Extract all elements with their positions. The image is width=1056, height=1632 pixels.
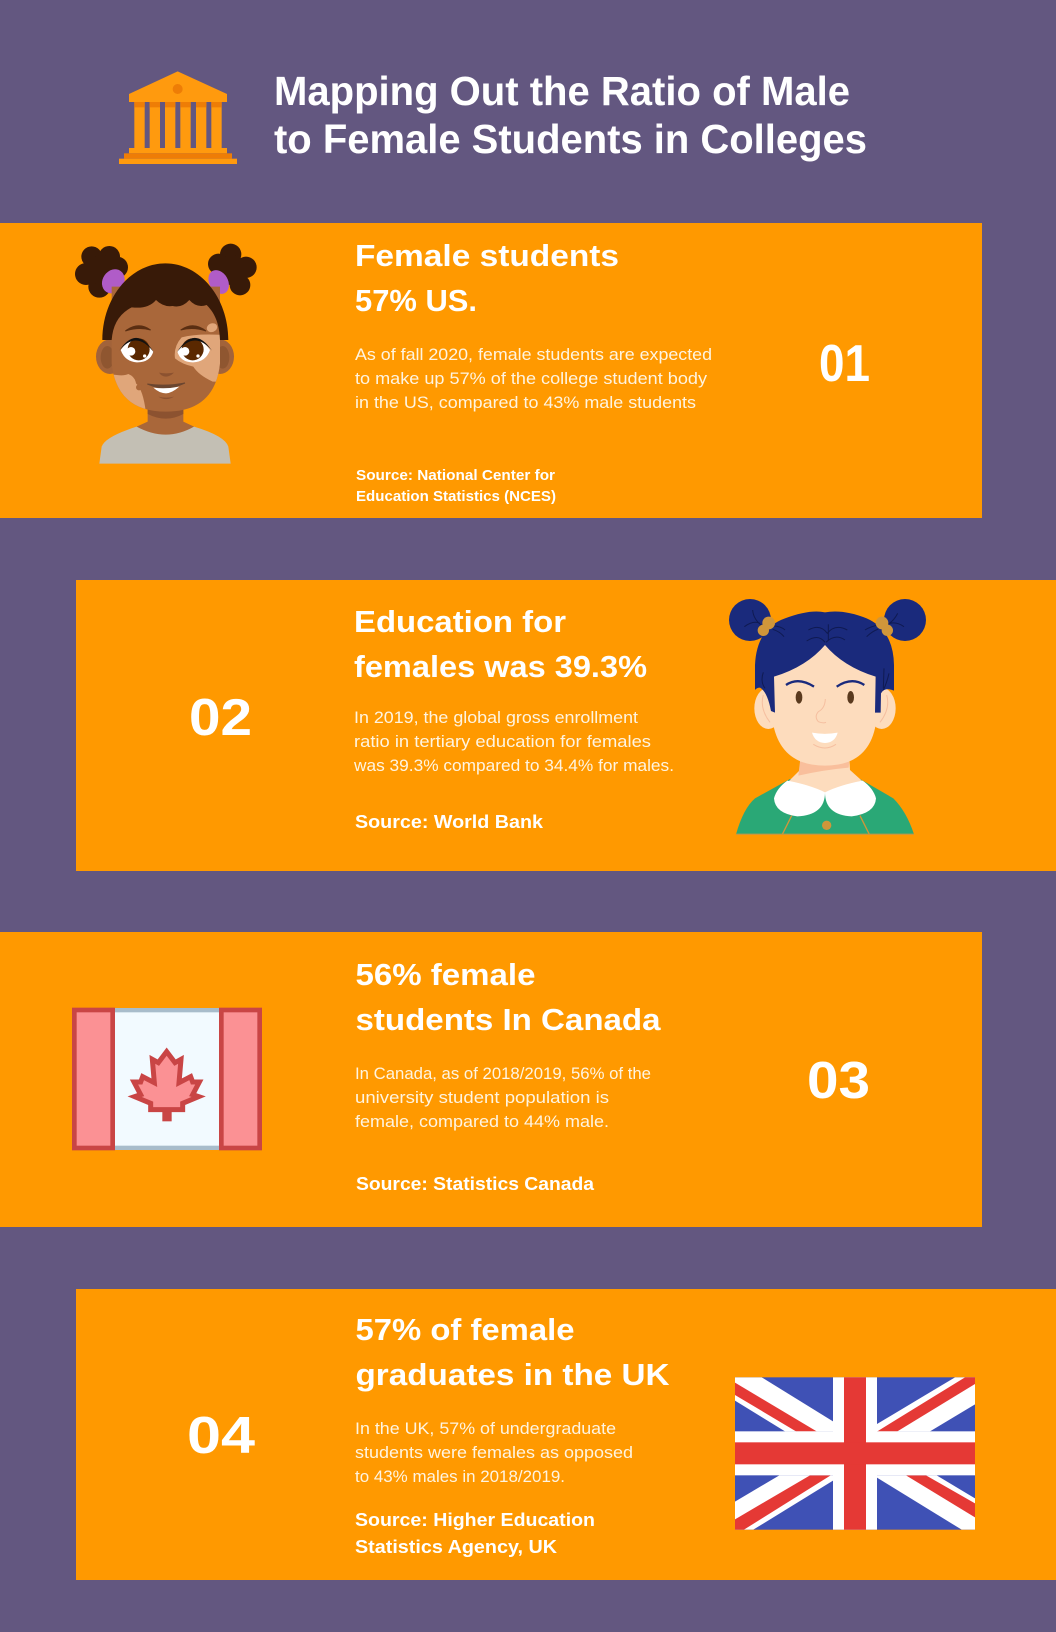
body text: to make up 57% of the college student body	[355, 370, 708, 388]
heading: 57% of female	[356, 1312, 574, 1347]
number 03: 03	[807, 1052, 870, 1110]
eyebrows	[125, 326, 151, 331]
nose	[159, 373, 174, 377]
body text: In the UK, 57% of undergraduate	[355, 1420, 616, 1438]
panel background	[76, 1289, 1056, 1580]
title	[274, 68, 867, 162]
heading	[356, 1312, 670, 1392]
body text: ratio in tertiary education for females	[354, 733, 651, 751]
title: to Female Students in Colleges	[274, 116, 867, 162]
source: Source: National Center for	[356, 467, 555, 484]
body text: As of fall 2020, female students are expected	[355, 346, 712, 364]
body text	[355, 1065, 651, 1131]
eyes	[121, 339, 153, 362]
face	[112, 287, 220, 412]
panel background	[0, 932, 982, 1227]
icon: UK flag	[735, 1377, 975, 1530]
body text: In 2019, the global gross enrollment	[354, 709, 638, 727]
hair	[102, 263, 228, 340]
source	[355, 1510, 595, 1557]
body text: students were females as opposed	[355, 1444, 633, 1462]
body text: in the US, compared to 43% male students	[355, 394, 696, 412]
body text	[353, 709, 674, 775]
source: Statistics Agency, UK	[355, 1537, 557, 1557]
mouth	[147, 383, 185, 389]
ears	[96, 339, 124, 374]
number 02: 02	[189, 689, 252, 747]
panel background	[0, 223, 982, 518]
heading: students In Canada	[356, 1002, 661, 1037]
body text: was 39.3% compared to 34.4% for males.	[353, 757, 674, 775]
icon: college building	[119, 71, 237, 164]
body text: to 43% males in 2018/2019.	[355, 1468, 565, 1486]
illustration: girl with curly buns	[75, 244, 257, 464]
body text	[355, 346, 712, 412]
body text: In Canada, as of 2018/2019, 56% of the	[355, 1065, 651, 1083]
panel 02: global education for females	[76, 580, 1056, 871]
heading: Female students	[355, 238, 619, 273]
heading: graduates in the UK	[356, 1357, 670, 1392]
heading: 57% US.	[355, 283, 477, 318]
heading	[355, 238, 619, 318]
source: Source: Higher Education	[355, 1510, 595, 1530]
source: Source: World Bank	[355, 812, 544, 832]
header: icon and title	[119, 68, 867, 164]
neck	[137, 403, 194, 435]
source	[356, 467, 556, 505]
source: Education Statistics (NCES)	[356, 488, 556, 505]
heading: Education for	[354, 604, 566, 639]
number 04: 04	[187, 1407, 255, 1465]
heading	[354, 604, 647, 684]
heading: females was 39.3%	[354, 649, 647, 684]
heading: 56% female	[356, 957, 536, 992]
panel 01: female students in the US	[0, 223, 982, 518]
title: Mapping Out the Ratio of Male	[274, 68, 850, 114]
panel background	[76, 580, 1056, 871]
panel 03: Canada	[0, 932, 982, 1227]
body text: female, compared to 44% male.	[355, 1113, 609, 1131]
body text: university student population is	[355, 1089, 609, 1107]
illustration: girl with blue hair	[729, 599, 926, 835]
number 01: 01	[819, 335, 870, 393]
shirt	[99, 427, 231, 464]
body text	[355, 1420, 633, 1486]
icon: Canadian flag	[74, 1008, 260, 1150]
heading	[356, 957, 661, 1037]
source: Source: Statistics Canada	[356, 1174, 595, 1194]
vitiligo patches	[114, 334, 220, 409]
panel 04: UK	[76, 1289, 1056, 1580]
